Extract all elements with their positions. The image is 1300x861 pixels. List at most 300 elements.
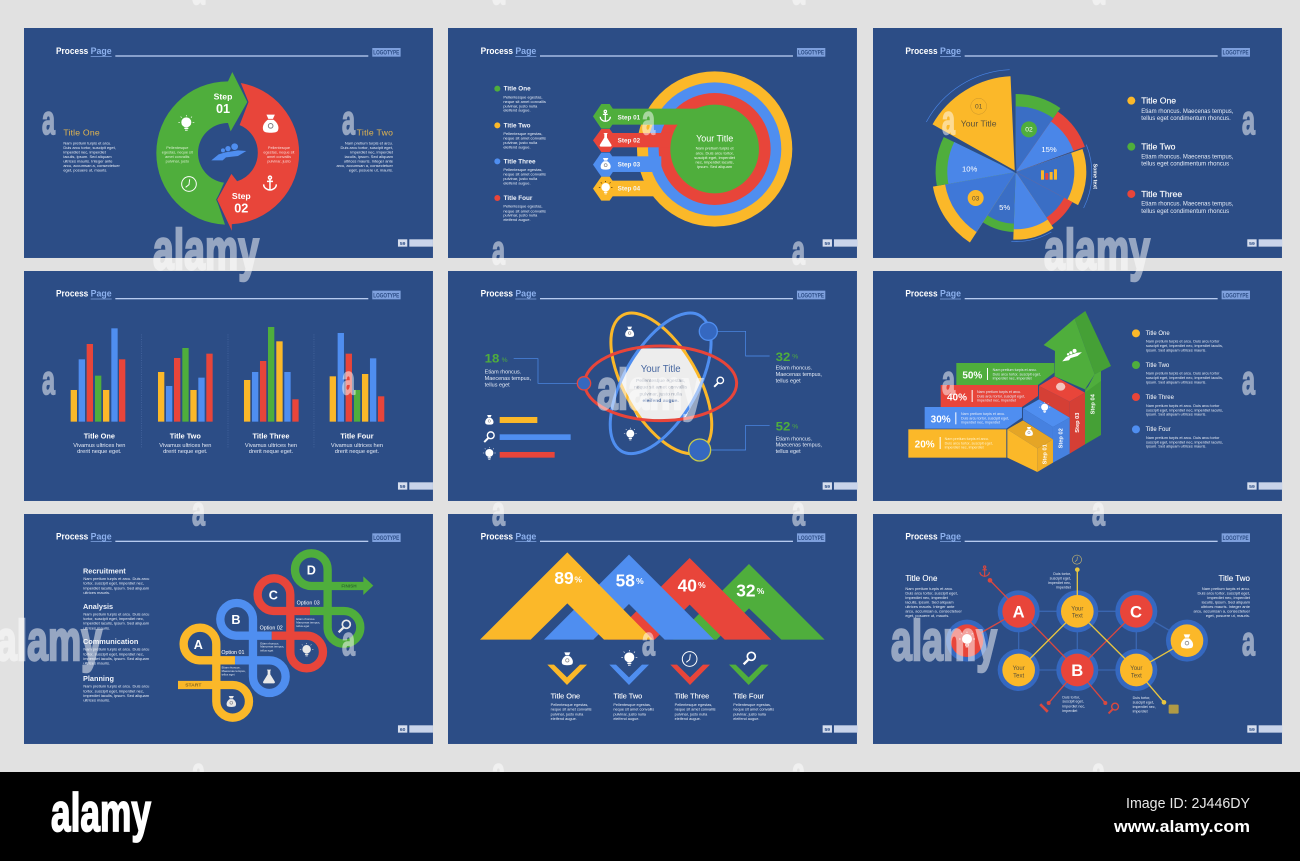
text block: title two: iaculis, ipsum. Sed aliquam	[345, 154, 394, 159]
step labels: 01	[216, 102, 230, 116]
centre text: neque sit amet convallis	[634, 385, 688, 391]
watermarks: a	[642, 618, 656, 664]
text block: title two: arcu, accumsan a, consectetuer	[336, 163, 394, 168]
column captions: Pellentesque egestas,	[551, 703, 588, 707]
legend: Title One	[504, 86, 531, 93]
centre text: pulvinar, justo nulla	[639, 391, 682, 397]
column captions: eleifend augue.	[733, 717, 759, 721]
captions: Vivamus ultrices hen	[331, 443, 383, 449]
banner 50%: 50%	[962, 370, 982, 381]
stat: 52%: tellus eget	[776, 449, 801, 455]
node text: Your	[1013, 666, 1025, 672]
column captions	[551, 691, 774, 721]
left text list: tortor, suscipit eget, imperdiet nec,	[83, 651, 144, 656]
blue column	[1023, 399, 1070, 463]
segment text: amet convallis	[267, 155, 291, 159]
small captions: imperdiet	[1062, 709, 1077, 713]
centre text	[634, 364, 688, 404]
captions: Vivamus ultrices hen	[245, 443, 297, 449]
column captions: Pellentesque egestas,	[733, 703, 771, 707]
stat: 52%: %	[792, 423, 798, 430]
percent labels: 58	[616, 571, 635, 591]
stat: 32%: 32	[776, 350, 791, 364]
option notes: Maecenas tempus,	[296, 620, 320, 624]
yellow column	[1007, 420, 1053, 472]
loop letters	[194, 563, 316, 652]
panel: 3D staircase arrow	[873, 271, 1282, 501]
segment text: egestas, neque sit	[263, 151, 295, 155]
left text list: imperdiet iaculis, ipsum. Sed aliquam	[83, 621, 150, 626]
step labels: Step 02	[618, 138, 641, 145]
option notes: Maecenas tempus,	[260, 645, 284, 649]
header: Page	[515, 289, 536, 299]
network icons	[959, 555, 1193, 714]
loop letters: C	[269, 588, 278, 602]
percent labels: %	[636, 576, 644, 586]
step labels	[618, 115, 641, 193]
header: LOGOTYPE	[1223, 50, 1249, 57]
segment text: pulvinar, justo	[166, 160, 189, 164]
banner 50%: imperdiet nec, imperdiet	[993, 377, 1032, 381]
icon: bag	[263, 115, 278, 133]
column captions: pulvinar, justo nulla	[675, 712, 708, 716]
legend	[1132, 329, 1223, 449]
step labels: 02	[234, 201, 248, 215]
percent labels: %	[698, 580, 706, 590]
option notes: tellus eget	[222, 673, 235, 677]
option notes: tellus eget	[260, 648, 273, 652]
header: Process	[481, 289, 513, 299]
pie labels	[961, 98, 1098, 212]
banner 40%: Nam pretium turpis et arcu.	[977, 390, 1021, 394]
legend: Pellentesque egestas,	[503, 94, 543, 99]
loop icons	[227, 620, 350, 707]
segment text: egestas, neque sit	[162, 151, 194, 155]
stat: 32%: %	[792, 353, 798, 360]
text block: title two: imperdiet nec, imperdiet	[1207, 595, 1251, 600]
legend: Pellentesque egestas,	[503, 204, 543, 209]
text block: title two: arcu, accumsan a, consectetuer	[1193, 609, 1251, 614]
left text list: Nam pretium turpis et arcu. Duis arcu	[83, 647, 149, 652]
pie labels: 5%	[999, 203, 1010, 212]
legend: suscipit eget, imperdiet nec, imperdiet iaculis,	[1146, 440, 1223, 444]
node text: Text	[1131, 673, 1142, 679]
captions: drerit neque eget.	[163, 449, 208, 455]
red arrow segment	[217, 82, 300, 233]
legend: Title Three	[504, 158, 536, 165]
step labels: Step 04	[618, 186, 641, 193]
header: Process	[905, 289, 938, 299]
legend: Nam pretium turpis et arcu. Duis arcu tortor	[1146, 372, 1220, 376]
stat: 18%: tellus eget	[485, 382, 510, 388]
green arrow column	[1044, 311, 1111, 444]
text block: title two: iaculis, ipsum. Sed aliquam	[1202, 600, 1251, 605]
stat: 52%: Etiam rhoncus.	[776, 436, 813, 442]
node letters: C	[1130, 602, 1142, 621]
tag icons	[599, 110, 612, 194]
guide arcs	[926, 70, 1092, 241]
header: Page	[940, 531, 961, 541]
captions: Title Two	[170, 432, 201, 441]
stair icons	[1025, 348, 1083, 436]
watermarks: a	[492, 488, 506, 534]
text block: title one: imperdiet nec, imperdiet	[905, 595, 949, 600]
text block: title two	[1193, 574, 1251, 618]
percent labels: %	[574, 575, 582, 585]
left text list: imperdiet iaculis, ipsum. Sed aliquam	[83, 656, 150, 661]
legend: eleifend augue.	[503, 217, 531, 222]
header: Process	[905, 531, 938, 541]
legend: Title Four	[1146, 427, 1171, 433]
header: LOGOTYPE	[373, 292, 400, 299]
mini bar legend	[483, 415, 571, 460]
text block: title one: eget, posuere ut, mauris.	[905, 613, 949, 618]
text block: title one	[905, 574, 962, 618]
left text list: imperdiet iaculis, ipsum. Sed aliquam	[83, 693, 150, 698]
legend: eleifend augue.	[503, 108, 531, 113]
captions: drerit neque eget.	[335, 449, 380, 455]
step labels	[214, 92, 251, 215]
bar chart: title two	[158, 348, 213, 422]
legend: ipsum. Sed aliquam ultrices mauris.	[1146, 380, 1206, 384]
header: 59	[825, 241, 830, 247]
header: Process	[56, 46, 88, 56]
bar chart: title one	[71, 328, 125, 422]
captions: Title One	[84, 432, 115, 441]
legend: Title Two	[504, 122, 531, 129]
column captions: Title Two	[613, 691, 642, 700]
text block: title two: Title Two	[357, 128, 393, 138]
header: 59	[400, 484, 406, 490]
header: 60	[400, 727, 406, 733]
small captions: suscipit eget,	[1133, 700, 1154, 704]
banner 20%: 20%	[915, 439, 935, 450]
watermarks: a	[1242, 357, 1256, 403]
left text list: Planning	[83, 674, 114, 683]
watermarks: a	[1242, 97, 1256, 143]
legend: tellus eget condimentum rhoncus	[1141, 209, 1229, 215]
watermarks: a	[1242, 618, 1256, 664]
text block: title one: iaculis, ipsum. Sed aliquam	[63, 154, 112, 159]
text block: title one: arcu, accumsan a, consectetuer	[905, 609, 962, 614]
bar chart: title four	[330, 333, 384, 422]
node letters	[1013, 602, 1142, 680]
panel: bar charts	[24, 271, 433, 501]
image id: Image ID: 2J446DY	[1126, 795, 1250, 812]
captions: Title Four	[340, 432, 374, 441]
banner 20%: Nam pretium turpis et arcu.	[945, 437, 989, 441]
column captions: pulvinar, justo nulla	[613, 712, 647, 716]
watermarks: a	[1092, 749, 1106, 795]
centre green circle with step tag	[593, 104, 759, 193]
loop letters: B	[231, 613, 241, 627]
header: LOGOTYPE	[1223, 292, 1249, 299]
text block: title two: ultrices mauris. Integer ante	[1201, 604, 1251, 609]
centre text: Pellentesque egestas,	[636, 378, 685, 384]
legend: tellus eget condimentum rhoncus	[1141, 162, 1229, 168]
pie labels: Your Title	[961, 118, 997, 128]
stat: 18%: 18	[485, 352, 500, 366]
header: 59	[1249, 484, 1255, 490]
left text list: ultrices mauris.	[83, 625, 110, 630]
captions: drerit neque eget.	[77, 449, 122, 455]
node letters: B	[1071, 661, 1083, 680]
small captions: Duis tortor,	[1133, 696, 1150, 700]
step tag red	[593, 129, 676, 152]
step tag yellow	[593, 177, 655, 201]
green loop with finish arrow	[295, 553, 373, 644]
legend: Title Two	[1141, 142, 1176, 152]
option labels: Option 01	[221, 650, 244, 656]
watermarks: a	[342, 97, 356, 143]
watermarks: alamy	[891, 609, 997, 673]
option notes: Maecenas tempus,	[222, 669, 246, 673]
header	[905, 531, 1282, 733]
header	[481, 46, 858, 247]
panel: node network	[873, 514, 1282, 744]
green arrow segment	[156, 72, 247, 225]
legend: neque sit amet convallis	[503, 136, 546, 141]
banner 20%: imperdiet nec, imperdiet	[945, 446, 984, 450]
small captions: Duis tortor,	[1053, 572, 1071, 576]
connectors	[514, 331, 770, 450]
bar chart: title three	[244, 327, 299, 422]
concentric rings	[637, 71, 792, 227]
text block: title two: eget, posuere ut, mauris.	[349, 168, 393, 173]
header: Process	[56, 531, 88, 541]
step labels: Step	[232, 191, 251, 201]
text block: title two: eget, posuere ut, mauris.	[1206, 613, 1250, 618]
percent labels: 40	[678, 575, 697, 595]
alamy logo: alamy	[51, 783, 151, 843]
orbit nodes	[577, 322, 717, 461]
watermarks: a	[342, 357, 356, 403]
node discs	[951, 595, 1203, 686]
watermarks: a	[492, 749, 506, 795]
header: LOGOTYPE	[373, 50, 400, 57]
column captions: neque sit amet convallis	[613, 708, 654, 712]
watermarks: a	[42, 97, 56, 143]
step labels: Step 02	[1059, 428, 1065, 448]
banner 30%: Duis arcu tortor, suscipit eget,	[961, 416, 1009, 420]
stat: 32%: Maecenas tempus,	[776, 372, 822, 378]
watermarks: alamy	[597, 358, 703, 422]
legend: Nam pretium turpis et arcu. Duis arcu tortor	[1146, 340, 1220, 344]
option notes: Etiam rhoncus.	[296, 617, 315, 621]
banner 40%: Duis arcu tortor, suscipit eget,	[977, 394, 1025, 398]
red loop	[258, 578, 323, 668]
step labels: Step 03	[618, 162, 641, 169]
small captions: imperdiet	[1056, 586, 1071, 590]
chevron icons	[562, 650, 755, 666]
stat: 32%: Etiam rhoncus.	[776, 366, 813, 372]
column captions: pulvinar, justo nulla	[733, 712, 767, 716]
watermarks: a	[1092, 488, 1106, 534]
blue loop	[220, 603, 286, 693]
watermarks: a	[42, 357, 56, 403]
footer bar	[0, 772, 1300, 861]
captions: Title Three	[253, 432, 289, 441]
text block: title two: Nam pretium turpis et arcu.	[345, 141, 393, 146]
left text list: ultrices mauris.	[83, 698, 110, 703]
centre title: arcu. Duis arcu tortor,	[696, 150, 734, 155]
option labels: Option 02	[260, 626, 283, 632]
header: 59	[400, 241, 406, 247]
header: Page	[91, 531, 112, 541]
watermarks: a	[192, 749, 206, 795]
watermarks: alamy	[1044, 218, 1150, 282]
step tag blue	[593, 153, 661, 177]
loop letters: D	[307, 563, 316, 577]
panel: concentric circles	[448, 28, 858, 258]
header: 59	[825, 727, 830, 733]
icon: mini bars	[1041, 169, 1057, 180]
header: Page	[515, 46, 536, 56]
banner 40%: imperdiet nec, imperdiet	[977, 399, 1016, 403]
step labels	[1043, 393, 1097, 464]
stat: 32%	[776, 350, 822, 384]
legend: pulvinar, justo nulla	[503, 103, 538, 108]
panel: looped option path	[24, 514, 433, 744]
left text list: ultrices mauris.	[83, 661, 110, 666]
icon: team	[211, 143, 246, 160]
segment text: pulvinar, justo	[267, 160, 291, 164]
legend: Title Four	[504, 195, 533, 202]
text block: title one: arcu, accumsan a, consectetuer	[63, 163, 120, 168]
panel: step cycle	[24, 28, 433, 258]
watermarks: alamy	[0, 609, 102, 673]
node letters: A	[1013, 602, 1025, 621]
icon: bulb	[178, 115, 194, 131]
step labels: Step 01	[1043, 444, 1049, 464]
watermarks: a	[942, 97, 956, 143]
legend: Title One	[1146, 331, 1170, 337]
banner 30%: imperdiet nec, imperdiet	[961, 421, 1000, 425]
panel: mountain percentages	[448, 514, 858, 744]
left text list	[83, 567, 150, 703]
pie labels: 02	[1025, 127, 1033, 134]
header	[905, 289, 1282, 490]
text block: title one: Nam pretium turpis et arcu.	[905, 586, 953, 591]
mountain green	[673, 564, 825, 640]
centre title: ipsum. Sed aliquam	[697, 164, 733, 169]
text block: title two	[336, 128, 394, 173]
text block: title one: Duis arcu tortor, suscipit eget,	[905, 591, 958, 596]
option notes: Etiam rhoncus.	[222, 666, 241, 670]
column captions: Title One	[551, 691, 580, 700]
legend: Etiam rhoncus. Maecenas tempus,	[1141, 202, 1234, 208]
small captions: imperdiet nec,	[1133, 705, 1156, 709]
header: LOGOTYPE	[373, 535, 400, 542]
stat: 52%: Maecenas tempus,	[776, 443, 822, 449]
left text list: imperdiet iaculis, ipsum. Sed aliquam	[83, 585, 150, 590]
header	[56, 531, 433, 733]
legend: pulvinar, justo nulla	[503, 140, 538, 145]
header: Process	[481, 531, 513, 541]
left text list: tortor, suscipit eget, imperdiet nec,	[83, 688, 144, 693]
legend: Pellentesque egestas,	[503, 167, 543, 172]
stat: 18%: %	[502, 357, 508, 364]
site url: www.alamy.com	[1113, 817, 1250, 836]
orbits	[585, 297, 737, 469]
text block: title two: ultrices mauris. Integer ante	[344, 159, 394, 164]
watermarks: alamy	[153, 218, 259, 282]
centre title: nec, imperdiet iaculis,	[695, 159, 734, 164]
watermarks: a	[492, 227, 506, 273]
node halos	[946, 590, 1208, 691]
legend: ipsum. Sed aliquam ultrices mauris.	[1146, 348, 1206, 352]
watermarks: a	[792, 227, 806, 273]
column captions: Pellentesque egestas,	[613, 703, 651, 707]
header: Page	[91, 46, 112, 56]
text block: title one: ultrices mauris. Integer ante	[63, 159, 113, 164]
legend: tellus eget condimentum rhoncus.	[1141, 116, 1231, 122]
pie labels: 03	[972, 195, 980, 202]
option notes: Etiam rhoncus.	[260, 641, 279, 645]
column captions: Title Four	[733, 691, 765, 700]
column captions: neque sit amet convallis	[733, 708, 774, 712]
left text list: tortor, suscipit eget, imperdiet nec,	[83, 581, 144, 586]
stat: 18%: Etiam rhoncus.	[485, 370, 522, 376]
segment text: Pellentesque	[268, 146, 290, 150]
banner 30%: 30%	[931, 415, 951, 426]
left text list: Analysis	[83, 602, 113, 611]
header	[481, 531, 858, 733]
header: Process	[905, 46, 938, 56]
banner 50%	[956, 363, 1054, 385]
stat: 18%	[485, 352, 531, 388]
banner 40%: 40%	[947, 392, 967, 403]
banner 40%	[941, 385, 1038, 407]
pie labels: 15%	[1041, 145, 1057, 154]
red column	[1039, 376, 1085, 454]
node text: Your	[1071, 606, 1083, 612]
legend: eleifend augue.	[503, 180, 531, 185]
watermarks: a	[792, 488, 806, 534]
percent labels	[554, 568, 765, 600]
small captions: suscipit eget,	[1062, 700, 1084, 704]
legend: eleifend augue.	[503, 144, 531, 149]
header: LOGOTYPE	[798, 50, 824, 57]
watermarks: a	[192, 488, 206, 534]
icon: anchor	[264, 176, 276, 190]
banner 30%	[925, 407, 1022, 429]
header	[56, 46, 433, 247]
small captions: Duis tortor,	[1062, 695, 1080, 699]
banner 50%: Nam pretium turpis et arcu.	[993, 368, 1037, 372]
legend: Etiam rhoncus. Maecenas tempus,	[1141, 109, 1234, 115]
option notes: tellus eget	[296, 624, 309, 628]
mountain yellow	[480, 552, 653, 640]
small captions: imperdiet nec,	[1048, 581, 1071, 585]
header: Page	[940, 289, 961, 299]
green loop with finish arrow: FINISH	[341, 584, 357, 589]
header: 59	[1249, 241, 1255, 247]
centre title: suscipit eget, imperdiet	[694, 155, 736, 160]
left text list: Recruitment	[83, 567, 126, 576]
legend: Pellentesque egestas,	[503, 131, 543, 136]
stat: 18%: Maecenas tempus,	[485, 376, 531, 382]
text block: title one: iaculis, ipsum. Sed aliquam	[905, 600, 954, 605]
watermarks: a	[792, 749, 806, 795]
legend: Nam pretium turpis et arcu. Duis arcu tortor	[1146, 436, 1220, 440]
pie labels: 01	[975, 104, 983, 111]
legend: Etiam rhoncus. Maecenas tempus,	[1141, 155, 1234, 161]
step labels: Step 04	[1091, 393, 1097, 414]
legend: neque sit amet convallis	[503, 172, 546, 177]
legend: neque sit amet convallis	[503, 208, 546, 213]
captions: Vivamus ultrices hen	[159, 443, 211, 449]
